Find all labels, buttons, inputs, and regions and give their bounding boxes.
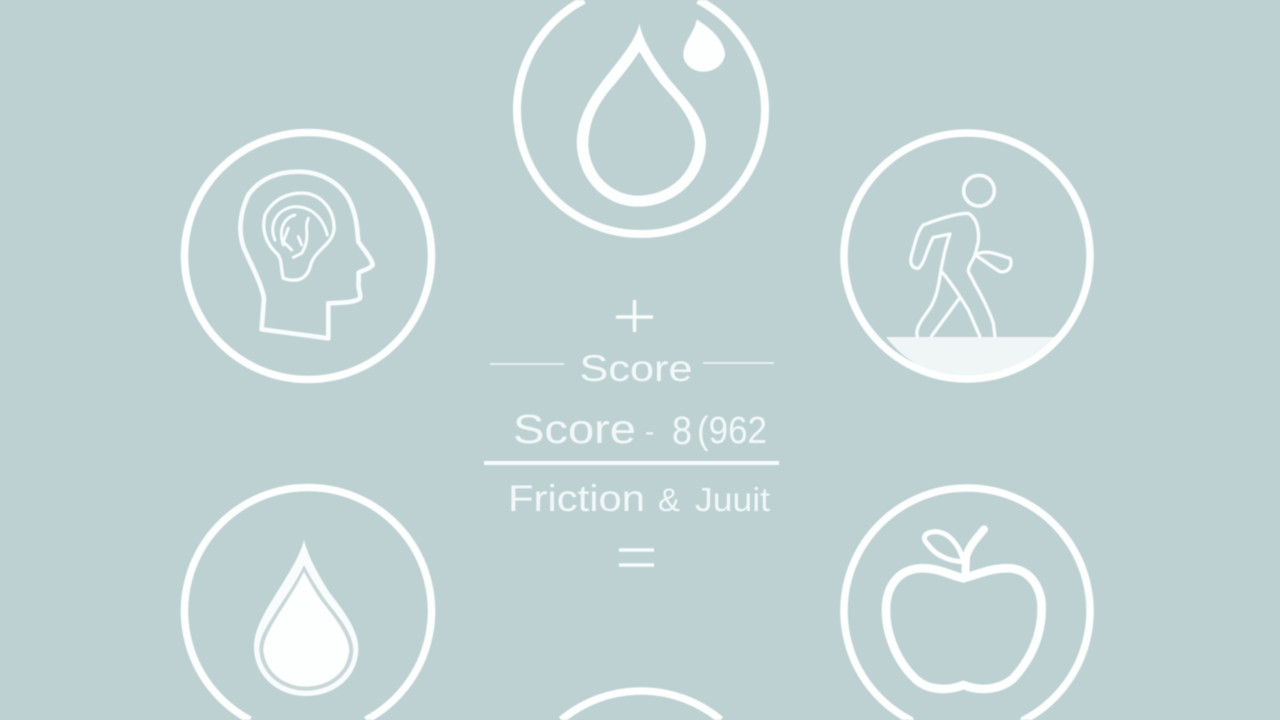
icon: filled water drop in circle: [184, 487, 432, 720]
numerator: Score: [513, 406, 636, 452]
central formula: [484, 300, 779, 565]
denominator: [508, 478, 770, 519]
numerator: 8: [672, 409, 692, 453]
score heading with side rules: Score: [580, 348, 692, 389]
denominator: Friction: [508, 478, 645, 519]
denominator: Juuit: [695, 481, 770, 518]
numerator: [513, 406, 767, 453]
plus sign: [616, 300, 653, 332]
fraction bar: [484, 461, 779, 465]
icon: apple in circle: [844, 488, 1090, 720]
icon: bottom circle, partly cropped: [561, 691, 721, 720]
icon: head with brain in circle: [184, 132, 432, 380]
ground band: [886, 337, 1062, 376]
icon: top water drop in circle: [517, 0, 765, 234]
numerator: (962: [697, 410, 767, 452]
icon: walking person in circle: [844, 133, 1090, 379]
denominator: &: [658, 482, 680, 518]
numerator: -: [645, 416, 654, 447]
equals sign: [619, 550, 654, 565]
